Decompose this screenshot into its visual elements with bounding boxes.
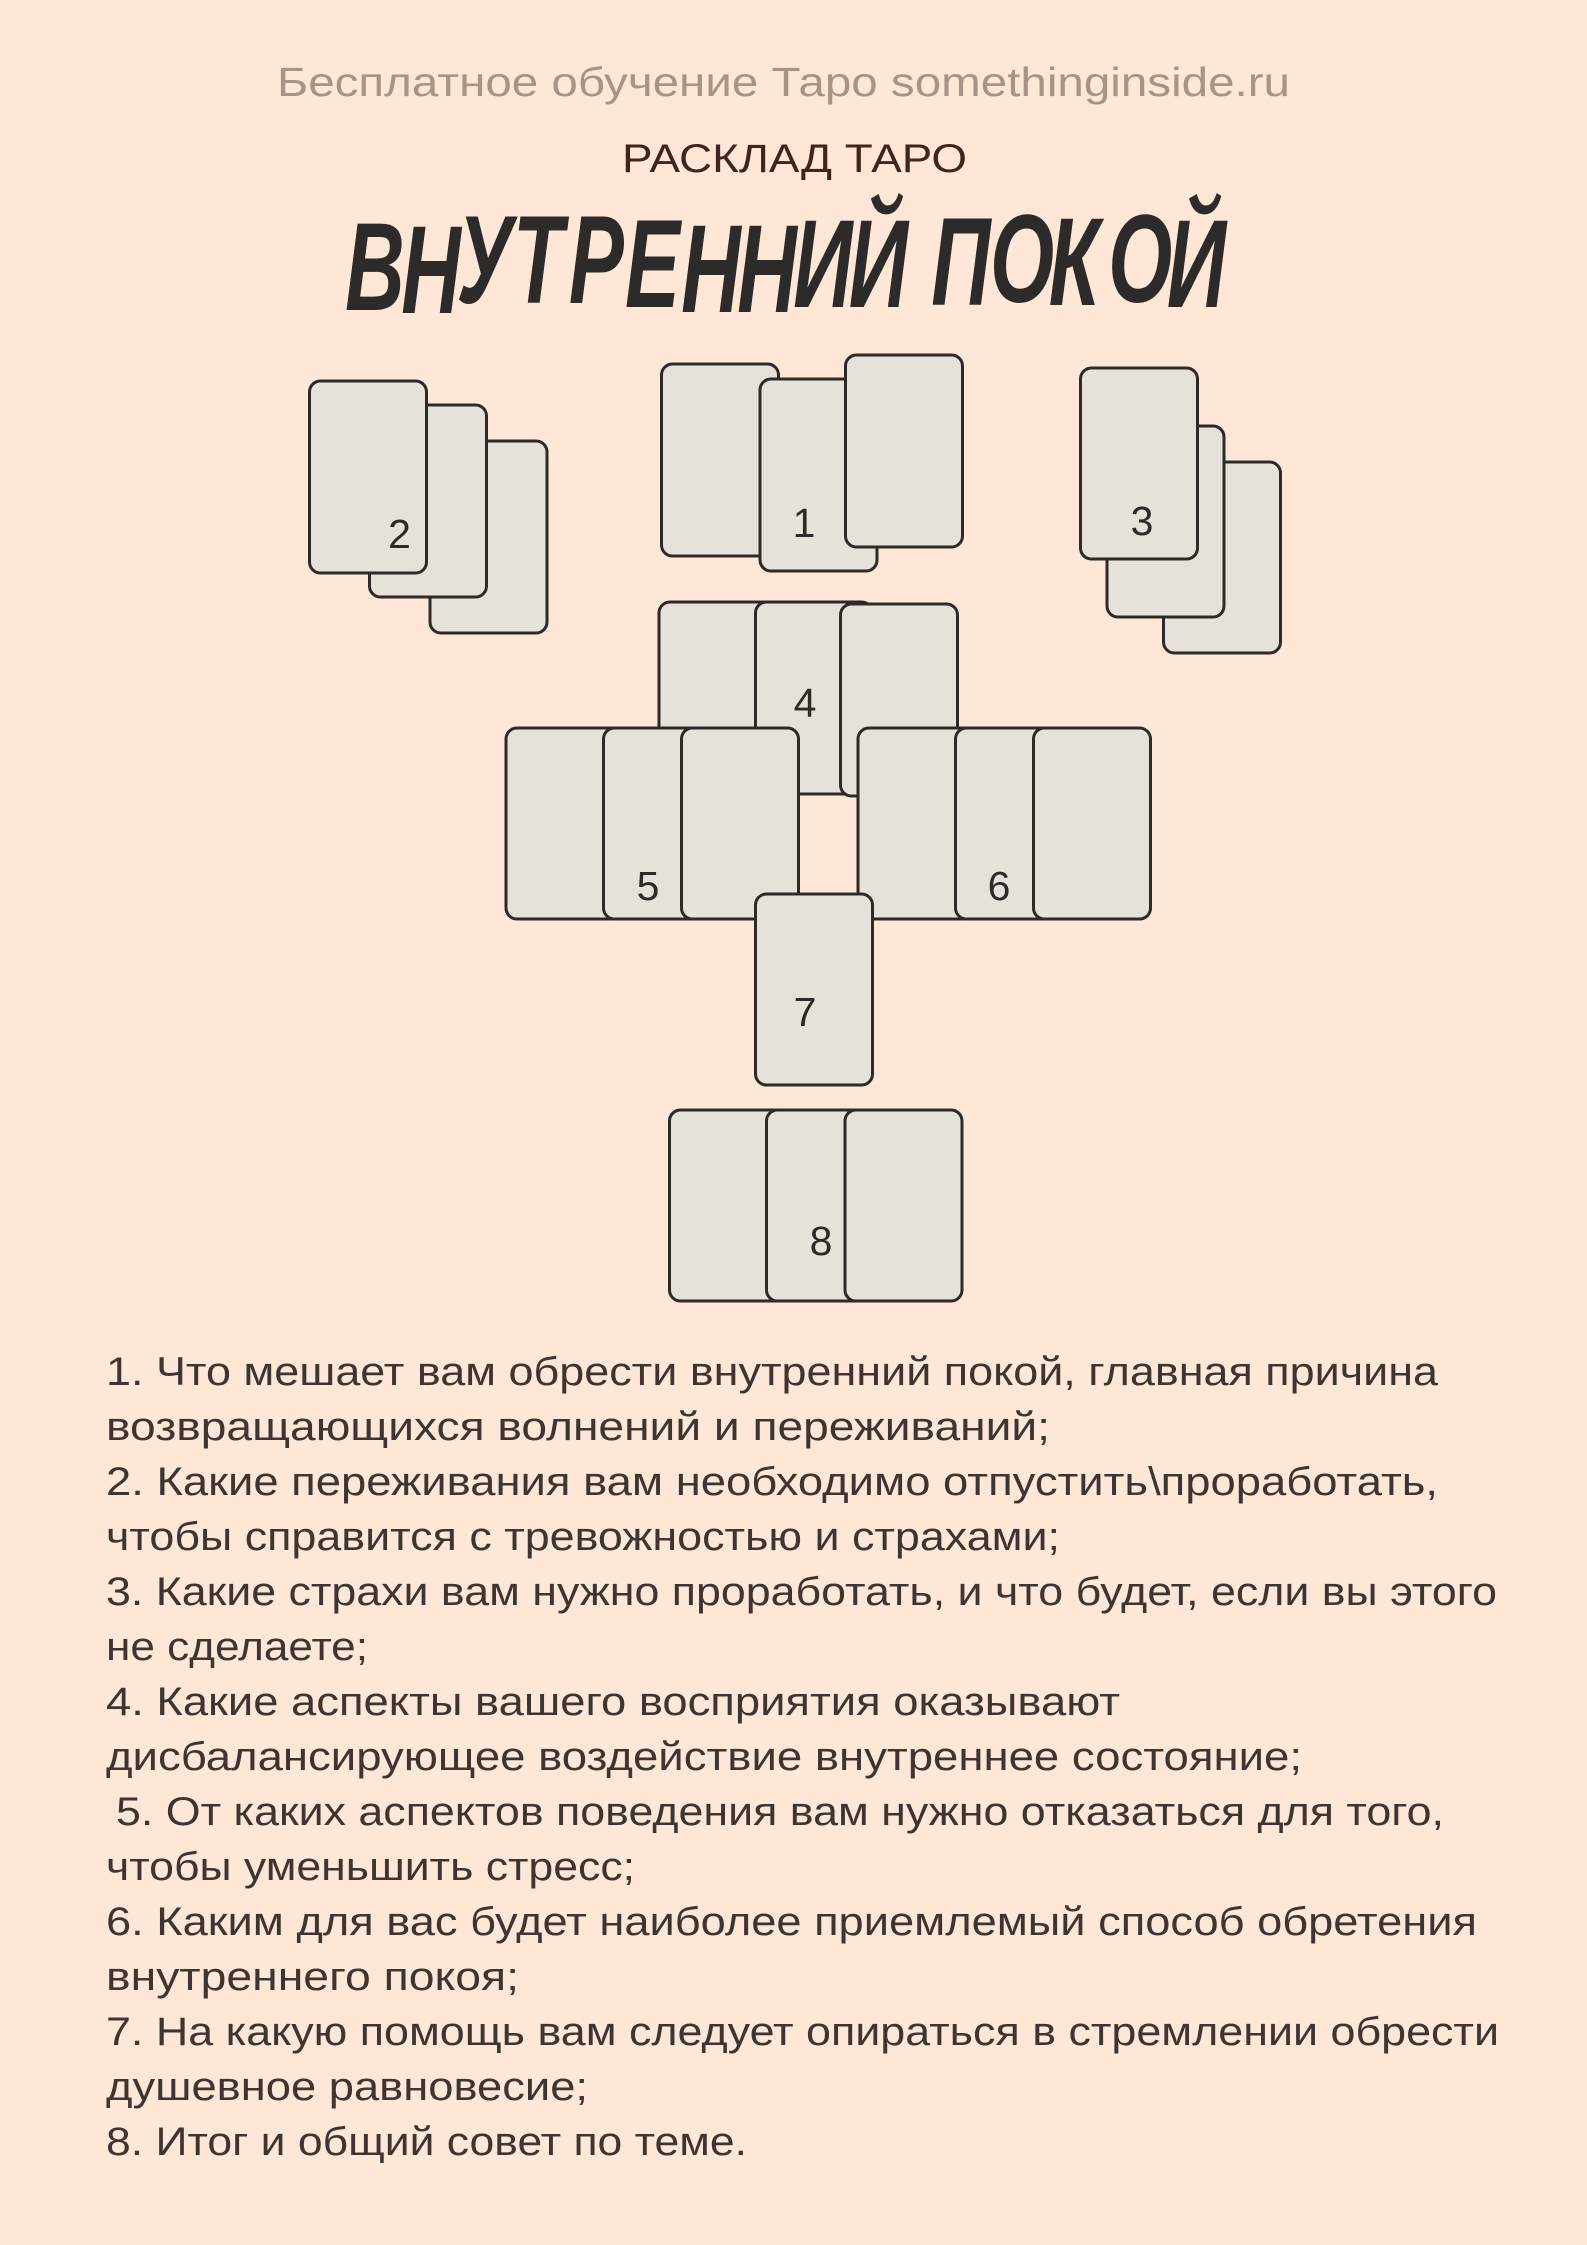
text block: position meanings	[106, 1350, 1499, 2164]
position 6: 6. Каким для вас будет наиболее приемлемый способ обретения	[106, 1900, 1477, 1944]
card 7	[756, 894, 872, 1085]
card group 8: 8	[810, 1218, 832, 1264]
card group 2	[310, 381, 547, 633]
position 1: возвращающихся волнений и переживаний;	[106, 1405, 1050, 1449]
card group 5	[506, 728, 798, 919]
position 4	[106, 1680, 1302, 1779]
subtitle: РАСКЛАД ТАРО	[622, 137, 967, 181]
card group 1: 1	[793, 500, 815, 546]
card group 8	[670, 1110, 962, 1301]
position 6: внутреннего покоя;	[106, 1955, 519, 1999]
position 8: 8. Итог и общий совет по теме.	[106, 2120, 747, 2164]
position 5	[106, 1790, 1444, 1889]
position 2: чтобы справится с тревожностью и страхами;	[106, 1515, 1060, 1559]
card group 4	[659, 602, 958, 796]
position 6	[106, 1900, 1477, 1999]
card group 3: 3	[1131, 498, 1153, 544]
position 2	[106, 1460, 1438, 1559]
position 3: не сделаете;	[106, 1625, 368, 1669]
position 4: дисбалансирующее воздействие внутреннее состояние;	[106, 1735, 1302, 1779]
card group 1	[662, 355, 962, 571]
position 7	[106, 2010, 1499, 2109]
title: ВНУТРЕННИЙ ПОКОЙ	[345, 190, 1228, 340]
position 5: чтобы уменьшить стресс;	[106, 1845, 635, 1889]
position 3	[106, 1570, 1497, 1669]
card group 5: 5	[637, 863, 659, 909]
position 2: 2. Какие переживания вам необходимо отпустить\проработать,	[106, 1460, 1438, 1504]
position 3: 3. Какие страхи вам нужно проработать, и что будет, если вы этого	[106, 1570, 1497, 1614]
card 7: 7	[794, 989, 816, 1035]
card group 6: 6	[988, 863, 1010, 909]
position 1	[106, 1350, 1439, 1449]
position 7: душевное равновесие;	[106, 2065, 588, 2109]
position 5: 5. От каких аспектов поведения вам нужно отказаться для того,	[116, 1790, 1444, 1834]
card group 4: 4	[794, 680, 816, 726]
card group 2: 2	[388, 511, 411, 557]
card group 6	[858, 728, 1150, 919]
site caption: Бесплатное обучение Таро somethinginside.ru	[277, 59, 1290, 105]
card group 3	[1080, 368, 1280, 653]
position 7: 7. На какую помощь вам следует опираться в стремлении обрести	[106, 2010, 1499, 2054]
position 1: 1. Что мешает вам обрести внутренний покой, главная причина	[106, 1350, 1439, 1394]
position 4: 4. Какие аспекты вашего восприятия оказывают	[106, 1680, 1120, 1724]
